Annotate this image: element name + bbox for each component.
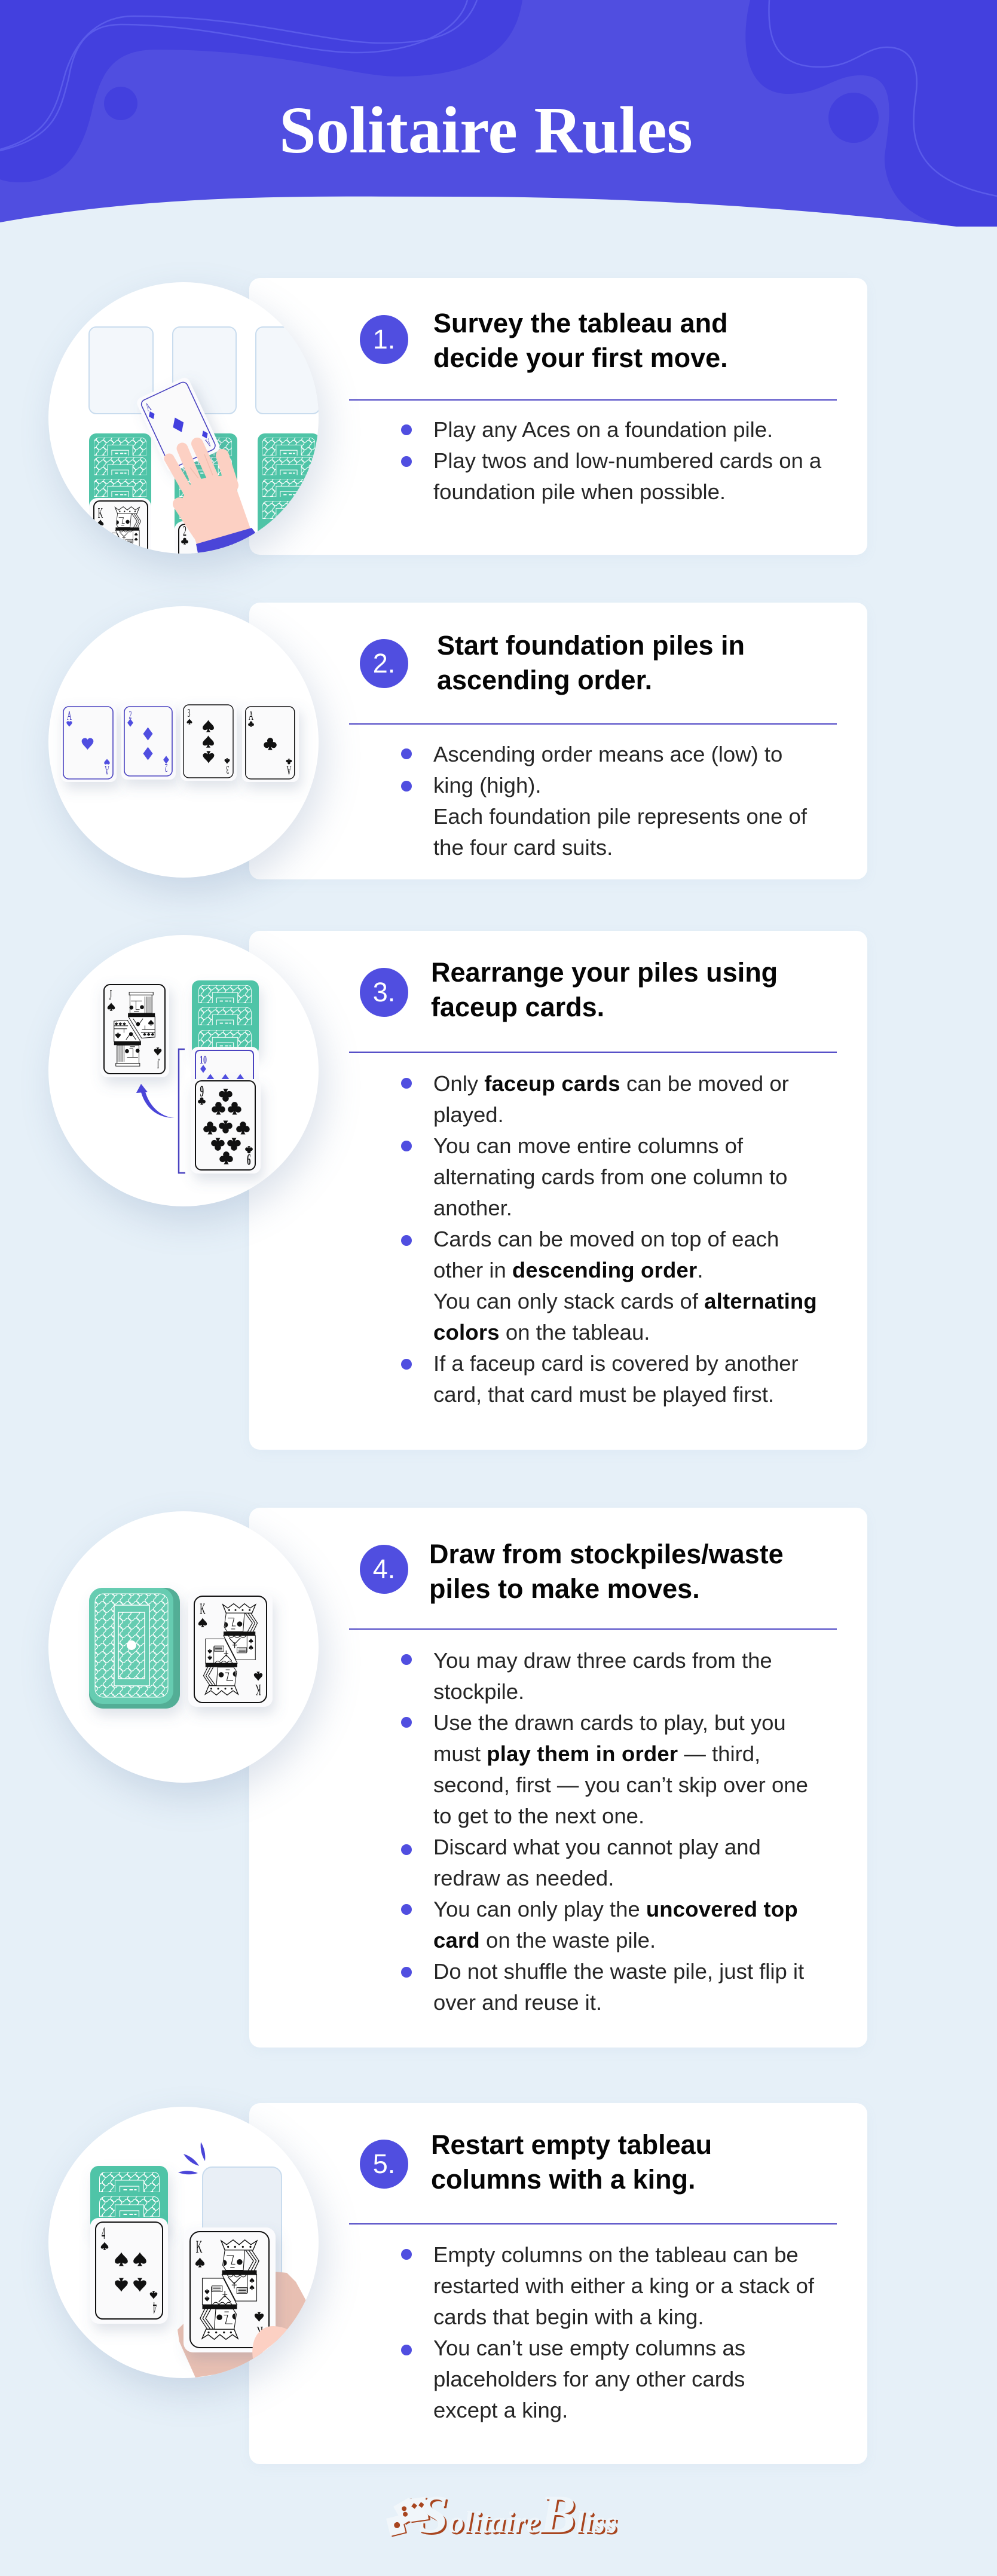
ten of diamonds <box>191 1047 259 1089</box>
bullet list step 2: Ascending order means ace (low) to <box>433 742 782 766</box>
ten of diamonds: 10 <box>200 1053 207 1067</box>
bullet list step 3: Only faceup cards can be moved or <box>433 1071 789 1096</box>
number badge 1: 1. <box>373 324 395 355</box>
bullet list step 3: another. <box>433 1196 512 1220</box>
number badge 1 <box>360 315 408 364</box>
number badge 4 <box>360 1545 408 1594</box>
bullet list step 4: Discard what you cannot play and <box>433 1835 761 1859</box>
bullet list step 2 <box>401 742 807 860</box>
bullet list step 5: placeholders for any other cards <box>433 2367 745 2391</box>
ace of clubs: A <box>249 708 253 723</box>
header banner <box>0 0 997 227</box>
king of spades held: K <box>196 2238 202 2257</box>
illustration circle: stockpile and waste pile <box>48 1511 319 1783</box>
three of spades: 3 <box>187 707 191 720</box>
bullet list step 4: redraw as needed. <box>433 1866 614 1890</box>
ace of hearts: A <box>105 763 109 777</box>
jack of spades <box>100 982 169 1077</box>
bullet list step 5: cards that begin with a king. <box>433 2305 704 2329</box>
bullet list step 3: other in descending order. <box>433 1258 704 1282</box>
panel: step 5 <box>45 2103 867 2464</box>
nine of clubs <box>191 1079 261 1174</box>
bullet list step 5: Empty columns on the tableau can be <box>433 2242 799 2267</box>
facedown cards <box>90 2166 168 2232</box>
bullet list step 4: must play them in order — third, <box>433 1741 760 1766</box>
bullet list step 3: played. <box>433 1102 504 1127</box>
bullet list step 4: over and reuse it. <box>433 1990 602 2015</box>
bullet list step 1: Play any Aces on a foundation pile. <box>433 417 773 442</box>
panel: step 4 <box>45 1508 867 2048</box>
number badge 2: 2. <box>373 648 395 679</box>
heading step 4: Draw from stockpiles/waste <box>429 1539 784 1569</box>
ace of hearts <box>61 704 117 782</box>
waste pile king of spades: K <box>200 1601 206 1618</box>
bullet list step 4: Use the drawn cards to play, but you <box>433 1710 786 1735</box>
empty column slot <box>203 2167 282 2281</box>
bullet list step 3: You can only stack cards of alternating <box>433 1289 817 1313</box>
bullet list step 4: You may draw three cards from the <box>433 1648 772 1673</box>
three of spades: 3 <box>226 763 230 775</box>
heading step 4 <box>429 1539 784 1604</box>
illustration circle: king placed on empty column <box>48 2107 319 2378</box>
facedown cards <box>192 980 259 1055</box>
bullet list step 4: stockpile. <box>433 1679 524 1704</box>
four of spades: 4 <box>102 2224 105 2242</box>
logo wordmark: SolitaireBliss <box>418 2485 617 2544</box>
two of diamonds: 2 <box>129 709 132 722</box>
bullet list step 3: You can move entire columns of <box>433 1133 743 1158</box>
bullet list step 2: Each foundation pile represents one of <box>433 804 807 829</box>
illustration circle: hand placing ace on tableau <box>48 282 319 554</box>
text card background <box>249 278 867 555</box>
number badge 3 <box>360 968 408 1017</box>
bullet list step 1: foundation pile when possible. <box>433 479 726 504</box>
hand with cuff <box>169 444 256 556</box>
logo: Solitaire Bliss <box>386 2485 618 2544</box>
illustration circle: moving cards between columns <box>48 935 319 1206</box>
logo icon: card fan <box>386 2496 430 2537</box>
waste pile king of spades <box>188 1593 273 1707</box>
heading step 3: faceup cards. <box>431 992 604 1022</box>
text card background <box>249 603 867 879</box>
four of spades <box>90 2218 168 2324</box>
heading step 5 <box>431 2129 712 2195</box>
heading step 4: piles to make moves. <box>429 1573 700 1604</box>
bullet list step 2: the four card suits. <box>433 835 613 860</box>
heading step 2: ascending order. <box>437 665 652 695</box>
stockpile deck <box>89 1588 180 1709</box>
ace of diamonds held in hand: A <box>143 401 153 414</box>
heading step 1 <box>433 308 728 373</box>
nine of clubs: 9 <box>247 1151 251 1168</box>
heading step 3 <box>431 957 778 1022</box>
two of clubs, tableau <box>175 521 237 584</box>
arrow <box>136 1084 175 1118</box>
bullet list step 1 <box>401 417 821 504</box>
bullet list step 4 <box>401 1648 808 2015</box>
hand back <box>178 2272 307 2378</box>
ace of hearts: A <box>67 708 72 723</box>
text card background <box>249 931 867 1450</box>
bullet list step 5: restarted with either a king or a stack of <box>433 2274 814 2298</box>
bullet list step 3: colors on the tableau. <box>433 1320 650 1344</box>
bullet list step 4: to get to the next one. <box>433 1804 644 1828</box>
heading step 5: Restart empty tableau <box>431 2129 712 2160</box>
jack of spades: J <box>109 988 112 1003</box>
panel: step 1 <box>45 278 867 578</box>
waste pile king of spades: K <box>255 1681 261 1698</box>
bullet list step 5: You can’t use empty columns as <box>433 2336 745 2360</box>
bullet list step 3: If a faceup card is covered by another <box>433 1351 799 1376</box>
bullet list step 1: Play twos and low-numbered cards on a <box>433 448 821 473</box>
bullet list step 4: second, first — you can’t skip over one <box>433 1773 808 1797</box>
text card background <box>249 2103 867 2464</box>
thumb <box>252 2326 289 2359</box>
two of clubs, tableau: 2 <box>183 524 186 539</box>
king of spades, tableau <box>89 498 151 588</box>
king of spades, tableau: K <box>98 506 103 521</box>
bullet list step 5: except a king. <box>433 2398 568 2422</box>
heading step 5: columns with a king. <box>431 2164 696 2195</box>
spark marks <box>178 2142 205 2174</box>
panel: step 2 <box>45 603 867 902</box>
heading step 3: Rearrange your piles using <box>431 957 778 988</box>
heading step 1: Survey the tableau and <box>433 308 728 338</box>
bullet list step 3: alternating cards from one column to <box>433 1165 787 1189</box>
bullet list step 3: card, that card must be played first. <box>433 1382 774 1407</box>
bullet list step 3 <box>401 1071 817 1407</box>
king of spades held <box>184 2227 276 2352</box>
ace of diamonds held in hand <box>135 376 222 474</box>
heading step 1: decide your first move. <box>433 343 728 373</box>
facedown card columns <box>89 433 320 553</box>
bullet list step 4: card on the waste pile. <box>433 1928 656 1952</box>
ace of clubs: A <box>286 763 291 777</box>
heading step 2 <box>437 630 745 695</box>
bracket <box>179 1049 185 1173</box>
ace of diamonds held in hand: A <box>203 436 213 449</box>
number badge 4: 4. <box>373 1554 395 1584</box>
king of spades held: K <box>257 2322 263 2342</box>
title: Solitaire Rules <box>279 94 693 167</box>
number badge 5 <box>360 2140 408 2189</box>
panel: step 3 <box>45 931 867 1450</box>
illustration circle: four foundation cards <box>48 606 319 878</box>
number badge 3: 3. <box>373 977 395 1007</box>
three of spades <box>181 702 237 781</box>
two of diamonds <box>121 704 176 780</box>
ace of clubs <box>242 704 299 782</box>
bullet list step 3: Cards can be moved on top of each <box>433 1227 779 1251</box>
jack of spades: J <box>157 1055 160 1071</box>
number badge 2 <box>360 639 408 688</box>
heading step 2: Start foundation piles in <box>437 630 745 661</box>
bullet list step 2: king (high). <box>433 773 542 797</box>
empty foundation slots <box>89 327 320 414</box>
nine of clubs: 9 <box>200 1083 204 1100</box>
four of spades: 4 <box>153 2299 157 2317</box>
bullet list step 4: You can only play the uncovered top <box>433 1897 798 1921</box>
number badge 5: 5. <box>373 2149 395 2179</box>
text card background <box>249 1508 867 2048</box>
bullet list step 5 <box>401 2242 814 2422</box>
bullet list step 4: Do not shuffle the waste pile, just flip it <box>433 1959 804 1984</box>
two of diamonds: 2 <box>164 761 168 774</box>
